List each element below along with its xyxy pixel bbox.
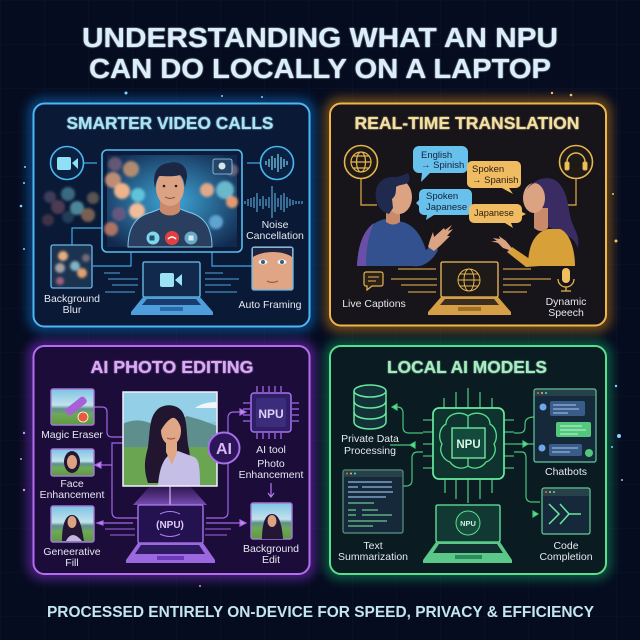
laptop: brain npu bbox=[423, 505, 512, 563]
label: background edit bbox=[243, 543, 299, 566]
label: ai tool photo enhancement: Photo bbox=[257, 458, 285, 470]
label: magic eraser: Magic Eraser bbox=[41, 429, 103, 441]
laptop: npu bbox=[126, 505, 215, 563]
heading: ai photo editing: AI PHOTO EDITING bbox=[90, 357, 253, 377]
label: text summarization: Summarization bbox=[338, 551, 408, 563]
label: dynamic speech: Dynamic bbox=[546, 296, 586, 308]
icon: headphones bbox=[560, 146, 592, 178]
main portrait photo bbox=[123, 392, 217, 486]
thumbnail: generative fill bbox=[51, 506, 94, 542]
icon: database bbox=[354, 385, 386, 429]
label: noise cancellation bbox=[246, 219, 304, 242]
label: chatbots: Chatbots bbox=[545, 466, 587, 478]
label: background edit: Edit bbox=[262, 554, 280, 566]
data streams: translation bbox=[391, 269, 551, 292]
speech bubble: spoken japanese bbox=[416, 189, 472, 220]
laptop: brain npu: NPU bbox=[460, 519, 476, 528]
label: private data processing bbox=[341, 433, 399, 457]
icon: globe bbox=[344, 146, 378, 178]
panel: real-time translation bbox=[330, 104, 606, 326]
chip: brain npu: NPU bbox=[456, 439, 481, 451]
label: generative fill: Fill bbox=[65, 557, 79, 569]
label: ai tool photo enhancement: Enhancement bbox=[239, 469, 303, 481]
data streams bbox=[104, 273, 239, 292]
thumbnail: background edit bbox=[251, 503, 292, 539]
chip: npu bbox=[243, 386, 299, 439]
connector lines: video calls bbox=[72, 163, 261, 266]
laptop: video bbox=[131, 262, 213, 315]
label: generative fill: Geneerative bbox=[43, 546, 101, 558]
connectors: photo editing bbox=[94, 407, 274, 526]
heading: real-time translation: REAL-TIME TRANSLATION bbox=[354, 113, 580, 133]
label: face enhancement: Face bbox=[60, 478, 84, 490]
icon: live captions bbox=[364, 272, 383, 290]
call controls bbox=[146, 231, 198, 245]
sound waves bbox=[245, 186, 302, 218]
speech bubble: spoken spanish bbox=[467, 161, 521, 194]
speech bubble: english spanish bbox=[413, 146, 468, 182]
label: noise cancellation: Noise bbox=[262, 219, 289, 231]
label: dynamic speech: Speech bbox=[548, 307, 584, 319]
speech bubble: spoken japanese: Spoken bbox=[426, 191, 458, 202]
label: auto framing: Auto Framing bbox=[238, 299, 302, 311]
label: text summarization bbox=[338, 540, 408, 563]
window: code completion bbox=[542, 488, 590, 534]
label: live captions: Live Captions bbox=[342, 298, 406, 310]
heading: smarter video calls: SMARTER VIDEO CALLS bbox=[66, 113, 274, 133]
icon: sound wave circle bbox=[260, 146, 294, 180]
heading: local ai models: LOCAL AI MODELS bbox=[387, 357, 547, 377]
person: woman bbox=[491, 178, 578, 267]
label: ai tool photo enhancement: AI tool bbox=[256, 444, 286, 456]
data streams: photo bbox=[105, 529, 231, 535]
icon: microphone bbox=[558, 268, 574, 291]
speech bubble: spoken japanese: Japanese bbox=[426, 202, 467, 213]
label: generative fill bbox=[43, 546, 101, 569]
person in video bbox=[128, 162, 212, 247]
person: man bbox=[357, 173, 453, 266]
window: chatbots bbox=[534, 389, 596, 462]
title: UNDERSTANDING WHAT AN NPU bbox=[82, 22, 558, 53]
thumbnail: face enhancement bbox=[51, 449, 94, 476]
title bbox=[82, 22, 558, 84]
connectors: translation bbox=[361, 178, 576, 205]
laptop: npu: (NPU) bbox=[156, 520, 184, 531]
title: CAN DO LOCALLY ON A LAPTOP bbox=[89, 53, 551, 84]
label: code completion: Code bbox=[553, 540, 579, 552]
label: background blur bbox=[44, 293, 100, 316]
light beam bbox=[133, 486, 207, 505]
speech bubble: english spanish: English bbox=[421, 150, 452, 161]
chip: brain npu bbox=[423, 388, 514, 503]
panel: smarter video calls bbox=[34, 104, 310, 326]
label: background edit: Background bbox=[243, 543, 299, 555]
chip: npu: NPU bbox=[258, 407, 284, 421]
footer caption: PROCESSED ENTIRELY ON-DEVICE FOR SPEED, PRIVACY & EFFICIENCY bbox=[47, 604, 594, 621]
label: code completion: Completion bbox=[539, 551, 593, 563]
speech bubble: japanese bbox=[469, 204, 526, 228]
label: face enhancement bbox=[40, 478, 104, 501]
speech bubble: japanese: Japanese bbox=[474, 208, 514, 218]
speech bubble: spoken spanish: → Spanish bbox=[472, 175, 518, 186]
mic toggle bbox=[213, 159, 232, 174]
label: background blur: Blur bbox=[63, 304, 82, 316]
connectors: local ai bbox=[390, 404, 540, 517]
label: code completion bbox=[539, 540, 593, 563]
label: noise cancellation: Cancellation bbox=[246, 230, 304, 242]
auto framing thumbnail bbox=[252, 247, 293, 290]
label: ai tool photo enhancement bbox=[239, 444, 303, 481]
ai badge bbox=[208, 432, 240, 464]
label: face enhancement: Enhancement bbox=[40, 489, 104, 501]
label: private data processing: Processing bbox=[344, 445, 396, 457]
ai badge: AI bbox=[216, 441, 232, 458]
laptop: globe bbox=[428, 262, 511, 315]
label: private data processing: Private Data bbox=[341, 433, 399, 445]
video call window bbox=[102, 150, 242, 252]
panel: local ai models bbox=[330, 346, 606, 574]
label: dynamic speech bbox=[546, 296, 586, 319]
label: background blur: Background bbox=[44, 293, 100, 305]
bokeh decoration left bbox=[42, 187, 99, 226]
label: text summarization: Text bbox=[363, 540, 383, 552]
icon: video camera circle bbox=[50, 146, 84, 180]
speech bubble: english spanish: → Spinish bbox=[421, 160, 464, 171]
thumbnail: magic eraser bbox=[51, 389, 94, 425]
background blur thumbnail bbox=[51, 245, 92, 288]
panel: ai photo editing bbox=[34, 346, 310, 574]
speech bubble: spoken spanish: Spoken bbox=[472, 164, 504, 175]
window: text summarization bbox=[343, 470, 403, 533]
